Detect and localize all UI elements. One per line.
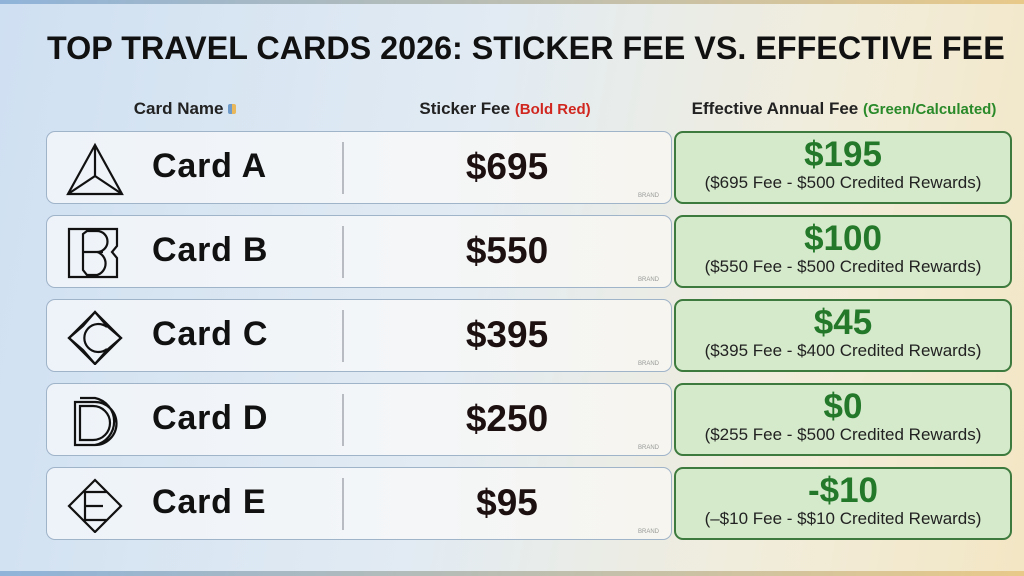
icon: D	[74, 396, 118, 446]
icon: triangle	[66, 142, 124, 196]
header: card name: Card Name	[134, 99, 224, 118]
effective fee E: (–$10 Fee - $$10 Credited Rewards)	[705, 509, 981, 528]
name: Card E	[152, 483, 266, 521]
effective fee D: ($255 Fee - $500 Credited Rewards)	[705, 425, 981, 444]
icon: B	[68, 228, 118, 278]
effective fee D	[674, 383, 1012, 456]
sticker fee: $395	[466, 314, 548, 355]
row: Card B	[46, 215, 672, 288]
effective fee C: ($395 Fee - $400 Credited Rewards)	[705, 341, 981, 360]
icon: E diamond	[68, 478, 122, 533]
row: Card D: BRAND	[638, 445, 659, 451]
header: sticker fee: Sticker Fee (Bold Red)	[419, 99, 591, 118]
icon: C diamond	[67, 310, 123, 365]
row: Card A: BRAND	[638, 193, 659, 199]
row: Card C: BRAND	[638, 361, 659, 367]
effective fee B	[674, 215, 1012, 288]
effective fee E	[674, 467, 1012, 540]
row: Card D	[46, 383, 672, 456]
row: Card E: BRAND	[638, 529, 659, 535]
effective fee E: -$10	[808, 471, 878, 510]
header: effective fee: Effective Annual Fee (Green/Calculated)	[692, 99, 996, 118]
effective fee D: $0	[824, 387, 862, 426]
effective fee C: $45	[814, 303, 872, 342]
effective fee A: $195	[804, 135, 882, 174]
effective fee A: ($695 Fee - $500 Credited Rewards)	[705, 173, 981, 192]
sticker fee: $695	[466, 146, 548, 187]
sticker fee: $550	[466, 230, 548, 271]
effective fee A	[674, 131, 1012, 204]
row: Card B: BRAND	[638, 277, 659, 283]
name: Card D	[152, 399, 268, 437]
sticker fee: $250	[466, 398, 548, 439]
name: Card B	[152, 231, 268, 269]
effective fee B: $100	[804, 219, 882, 258]
row: Card C	[46, 299, 672, 372]
top strip	[0, 0, 1024, 4]
name: Card A	[152, 147, 267, 185]
row: Card A	[46, 131, 672, 204]
effective fee B: ($550 Fee - $500 Credited Rewards)	[705, 257, 981, 276]
sticker fee: $95	[476, 482, 538, 523]
name: Card C	[152, 315, 268, 353]
effective fee C	[674, 299, 1012, 372]
bottom strip	[0, 571, 1024, 576]
row: Card E	[46, 467, 672, 540]
title: TOP TRAVEL CARDS 2026: STICKER FEE VS. EFFECTIVE FEE	[47, 30, 1005, 66]
